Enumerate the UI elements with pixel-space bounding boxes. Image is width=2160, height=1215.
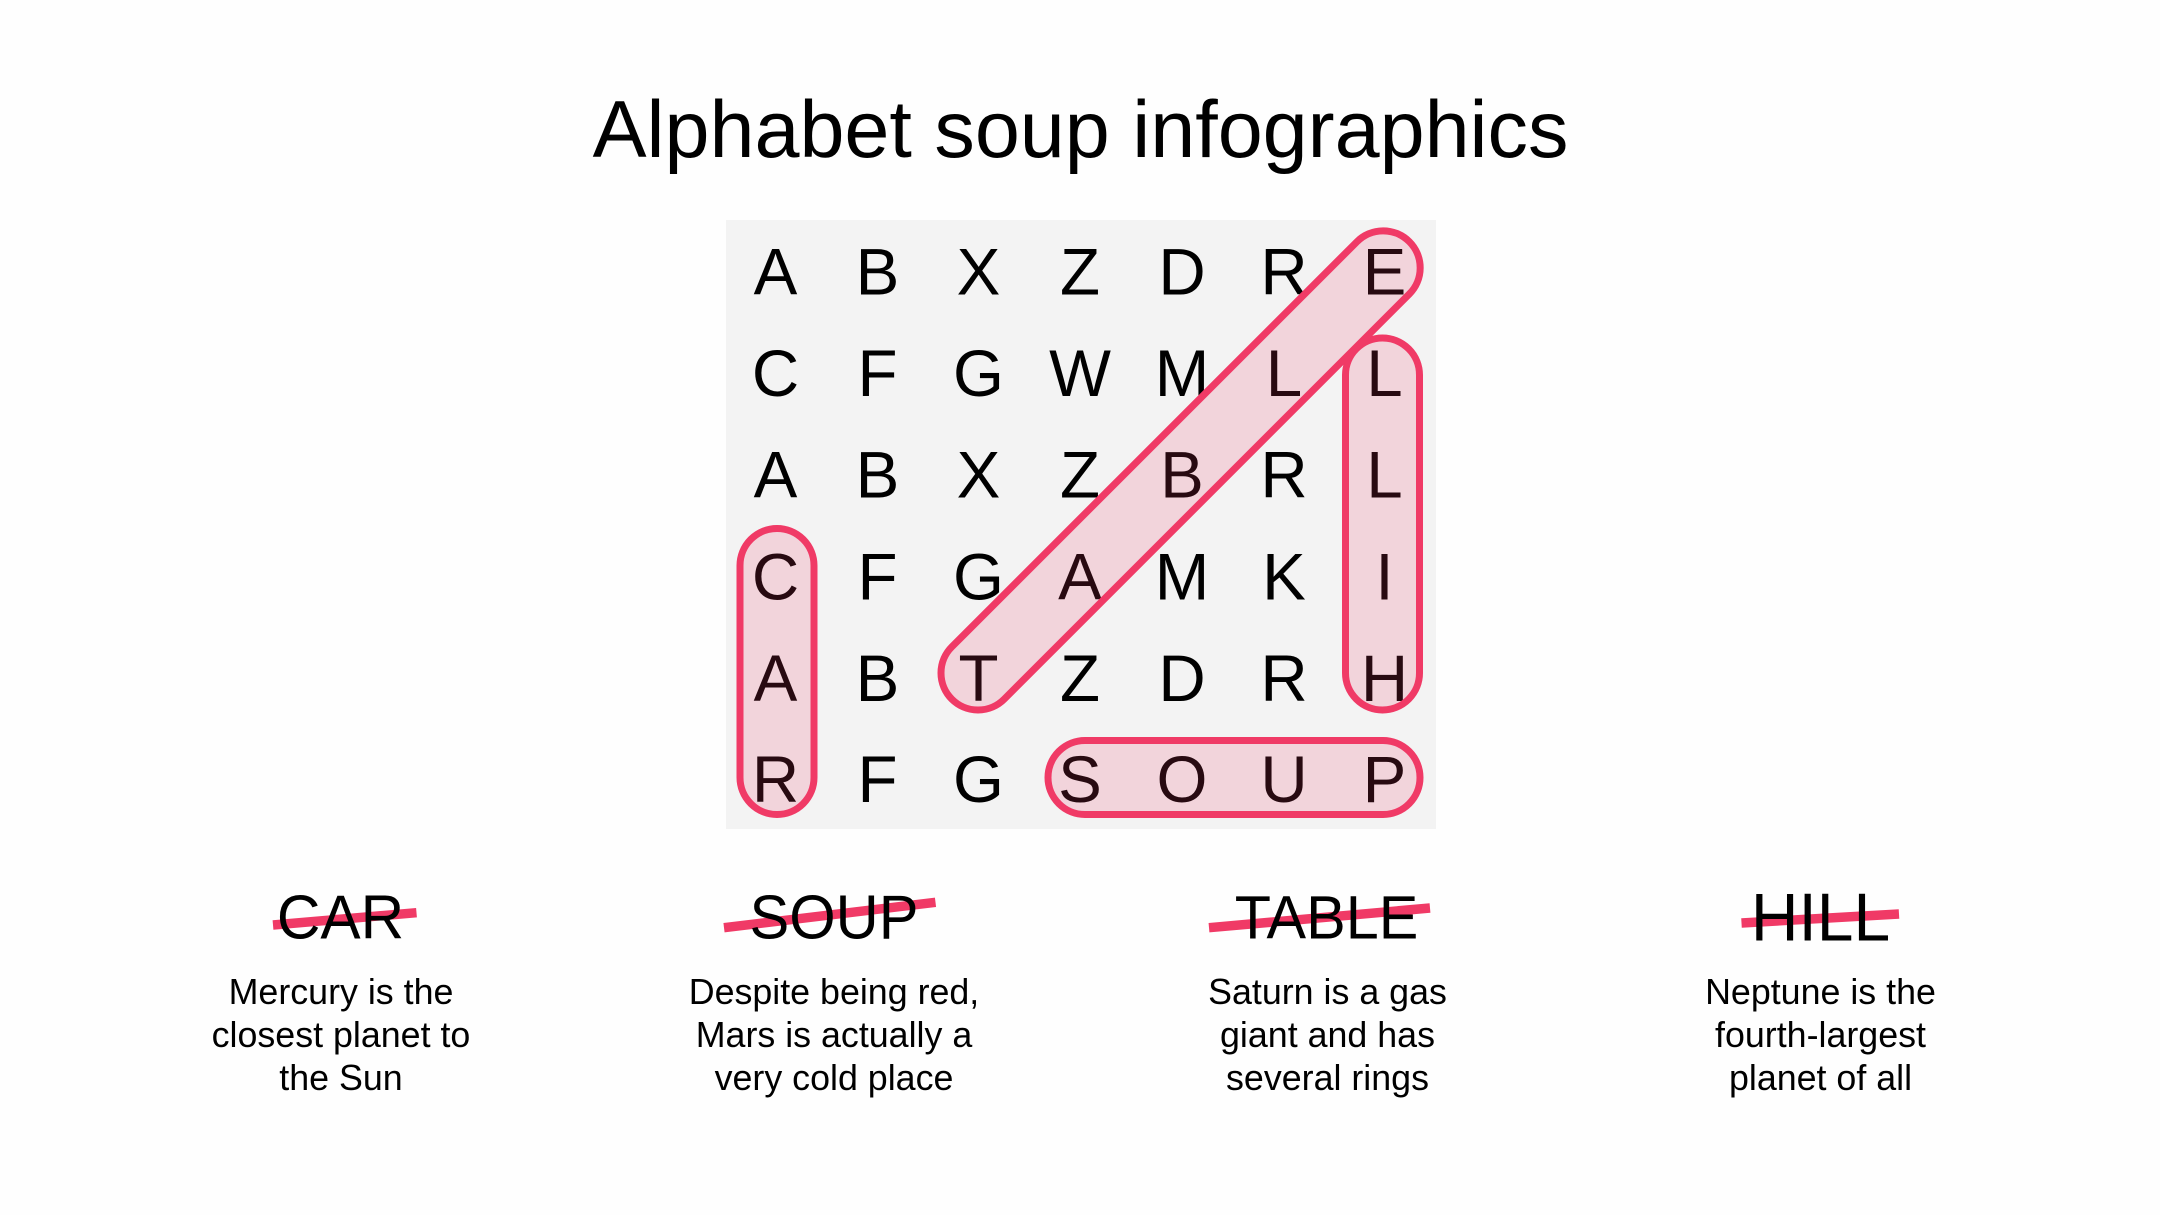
grid letters: T bbox=[958, 642, 999, 715]
description: TABLE: several rings bbox=[1226, 1058, 1429, 1098]
description: CAR: the Sun bbox=[279, 1058, 403, 1098]
highlight: TABLE diagonal bbox=[926, 216, 1435, 725]
description: CAR: closest planet to bbox=[212, 1015, 470, 1055]
highlight: SOUP bbox=[1048, 740, 1420, 814]
description: SOUP: Mars is actually a bbox=[696, 1015, 972, 1055]
strike line: CAR bbox=[273, 913, 416, 925]
grid letters: H bbox=[1361, 642, 1408, 715]
grid letters: L bbox=[1366, 337, 1403, 410]
description: SOUP: very cold place bbox=[715, 1058, 953, 1098]
description: HILL: Neptune is the bbox=[1705, 972, 1936, 1012]
panel: word search grid bbox=[726, 216, 1436, 829]
grid letters: G bbox=[953, 743, 1004, 816]
strike line: SOUP bbox=[724, 902, 936, 928]
title: Alphabet soup infographics bbox=[593, 85, 1568, 175]
grid letters: B bbox=[1160, 438, 1204, 512]
grid letters: B bbox=[856, 642, 899, 715]
grid letters: A bbox=[754, 642, 798, 715]
strike line: TABLE bbox=[1209, 908, 1430, 928]
grid letters: E bbox=[1363, 236, 1406, 308]
grid letters: Z bbox=[1060, 236, 1100, 308]
grid letters: X bbox=[957, 438, 1000, 512]
grid letters: A bbox=[1058, 540, 1102, 614]
grid letters: O bbox=[1157, 743, 1207, 816]
grid letters: R bbox=[1260, 642, 1308, 715]
grid letters: W bbox=[1049, 337, 1111, 410]
highlight: CAR bbox=[740, 528, 814, 814]
grid letters: M bbox=[1155, 337, 1209, 410]
word: CAR: CAR bbox=[277, 883, 404, 953]
grid letters: F bbox=[857, 540, 898, 614]
grid letters: C bbox=[752, 540, 799, 614]
grid letters: Z bbox=[1060, 642, 1100, 715]
word: TABLE: TABLE bbox=[1235, 883, 1418, 952]
grid letters: L bbox=[1266, 337, 1302, 410]
grid letters: F bbox=[857, 337, 898, 410]
grid letters: D bbox=[1158, 236, 1206, 308]
item: TABLE bbox=[1208, 883, 1447, 1098]
description: TABLE: Saturn is a gas bbox=[1208, 972, 1447, 1012]
word: HILL: HILL bbox=[1751, 880, 1890, 956]
grid letters: K bbox=[1262, 540, 1306, 614]
grid letters: L bbox=[1366, 438, 1403, 512]
strike line: HILL bbox=[1742, 914, 1899, 923]
grid letters: A bbox=[754, 438, 798, 512]
highlight: HILL bbox=[1346, 338, 1420, 710]
grid letters: F bbox=[857, 743, 898, 816]
grid letters: B bbox=[856, 438, 899, 512]
grid letters: Z bbox=[1060, 438, 1100, 512]
grid letters: B bbox=[856, 236, 899, 308]
grid letters: S bbox=[1058, 743, 1102, 816]
grid letters bbox=[752, 236, 1408, 816]
grid letters: C bbox=[752, 337, 799, 410]
description: SOUP: Despite being red, bbox=[689, 972, 979, 1012]
item: HILL bbox=[1705, 880, 1936, 1098]
description: TABLE: giant and has bbox=[1220, 1015, 1435, 1055]
description: HILL: fourth-largest bbox=[1715, 1015, 1926, 1055]
item: SOUP bbox=[689, 883, 979, 1098]
item: CAR bbox=[212, 883, 470, 1098]
grid letters: P bbox=[1363, 743, 1406, 816]
grid letters: I bbox=[1375, 540, 1394, 614]
grid letters: D bbox=[1158, 642, 1206, 715]
grid letters: X bbox=[957, 236, 1000, 308]
grid letters: M bbox=[1155, 540, 1209, 614]
grid letters: R bbox=[1260, 236, 1308, 308]
grid letters: R bbox=[1260, 438, 1308, 512]
grid letters: A bbox=[754, 236, 798, 308]
grid letters: U bbox=[1260, 743, 1308, 816]
grid letters: G bbox=[953, 337, 1004, 410]
word: SOUP: SOUP bbox=[750, 883, 918, 952]
grid letters: R bbox=[752, 743, 799, 816]
description: HILL: planet of all bbox=[1729, 1058, 1912, 1098]
description: CAR: Mercury is the bbox=[229, 972, 453, 1012]
grid background bbox=[726, 220, 1436, 829]
grid letters: G bbox=[953, 540, 1004, 614]
